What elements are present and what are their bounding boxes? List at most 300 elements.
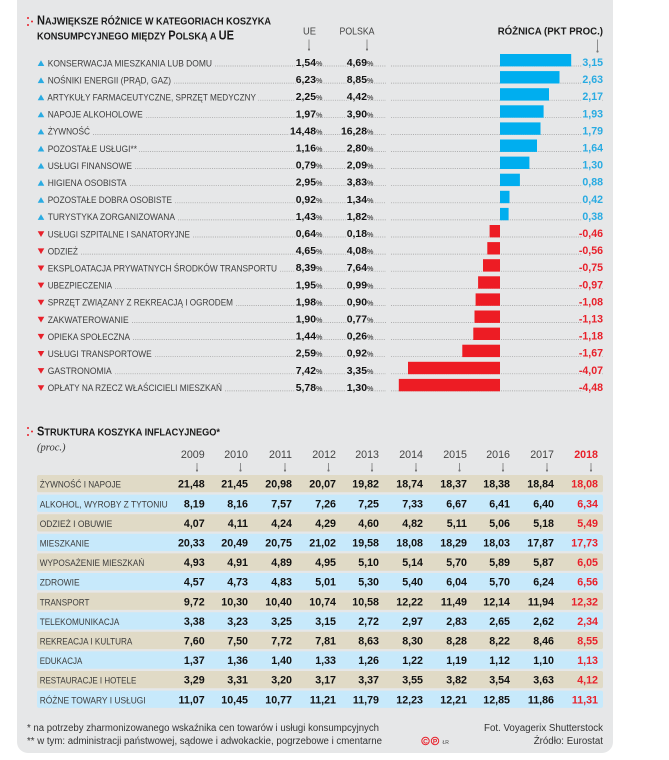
table row: mieszkanie: 18,29 xyxy=(440,538,467,550)
table row: mieszkanie: 20,33 xyxy=(178,538,205,550)
row: usługi szpitalne xyxy=(38,225,603,240)
table row: odzież i obuwie xyxy=(37,514,603,532)
table row: odzież i obuwie: 4,07 xyxy=(184,518,205,530)
table row: różne towary i usługi: 11,31 xyxy=(572,694,598,706)
heading: differences between Poland and EU xyxy=(37,14,271,42)
row: sprzęt związany z rekreacją: % xyxy=(367,298,374,307)
table row: alkohol, wyroby z tytoniu: 6,41 xyxy=(489,498,510,510)
table row: telekomunikacja: 2,34 xyxy=(577,616,598,628)
row: turystyka zorganizowana: % xyxy=(316,213,323,222)
row: eksploatacja środków transportu: EKSPLOATACJA PRYWATNYCH ŚRODKÓW TRANSPORTU xyxy=(48,262,277,274)
year headers: 2018 xyxy=(574,449,598,461)
table row: żywność i napoje: 18,38 xyxy=(483,479,510,491)
row: napoje alkoholowe: % xyxy=(367,110,374,119)
row: pozostałe usługi xyxy=(38,140,603,154)
table row: transport: 9,72 xyxy=(184,596,205,608)
row: żywność: 14,48 xyxy=(290,126,316,137)
row: odzież: % xyxy=(367,247,374,256)
table row: mieszkanie: 17,73 xyxy=(571,538,598,550)
table row: różne towary i usługi: 11,79 xyxy=(353,694,379,706)
table row: wyposażenie mieszkań: 6,05 xyxy=(577,557,598,569)
table row: odzież i obuwie: 4,60 xyxy=(358,518,379,530)
row: żywność: % xyxy=(367,127,374,136)
row: żywność xyxy=(38,122,603,137)
icon: section marker top xyxy=(27,17,33,26)
table row: rekreacja i kultura: 7,60 xyxy=(184,636,205,648)
row: opłaty na rzecz właścicieli xyxy=(38,379,603,394)
table row: odzież i obuwie: 4,24 xyxy=(271,518,292,530)
row: żywność: 1,79 xyxy=(582,125,603,137)
heading: differences between Poland and EU: NAJWIĘKSZE RÓŻNICE W KATEGORIACH KOSZYKA xyxy=(37,14,271,28)
table row: rekreacja i kultura: 7,50 xyxy=(227,636,248,648)
table row: edukacja: 1,22 xyxy=(402,655,423,667)
year headers: 2016 xyxy=(486,449,510,461)
row: opieka społeczna xyxy=(38,328,603,343)
table row: telekomunikacja: 2,97 xyxy=(402,616,423,628)
table row: alkohol, wyroby z tytoniu: 7,25 xyxy=(358,498,379,510)
row: artykuły farmaceutyczne: ARTYKUŁY FARMACEUTYCZNE, SPRZĘT MEDYCZNY xyxy=(47,92,256,102)
unit note: (proc.) xyxy=(37,443,66,454)
table row: wyposażenie mieszkań: WYPOSAŻENIE MIESZKAŃ xyxy=(40,558,144,568)
table row: zdrowie: 5,30 xyxy=(358,577,379,589)
table row: zdrowie: 4,73 xyxy=(227,577,248,589)
table row: edukacja: 1,19 xyxy=(446,655,467,667)
table row: restauracje i hotele: 3,63 xyxy=(533,675,554,687)
table row: alkohol, wyroby z tytoniu: 7,57 xyxy=(271,498,292,510)
table row: restauracje i hotele: 3,82 xyxy=(446,675,467,687)
row: higiena osobista: % xyxy=(316,179,323,188)
table row: rekreacja i kultura: REKREACJA I KULTURA xyxy=(40,636,133,646)
table row: edukacja: 1,12 xyxy=(489,655,510,667)
table row: edukacja: 1,37 xyxy=(184,655,205,667)
row: ubezpieczenia: 1,95 xyxy=(296,280,316,291)
table row: wyposażenie mieszkań: 5,70 xyxy=(446,557,467,569)
row: nośniki energii: % xyxy=(367,76,374,85)
table row: mieszkanie: MIESZKANIE xyxy=(40,538,89,548)
row: usługi szpitalne: USŁUGI SZPITALNE I SANATORYJNE xyxy=(48,229,190,239)
row: odzież: 4,65 xyxy=(296,246,316,257)
table row: restauracje i hotele: 3,37 xyxy=(358,675,379,687)
row: pozostałe dobra osobiste: POZOSTAŁE DOBRA OSOBISTE xyxy=(48,195,172,205)
row: sprzęt związany z rekreacją: 1,98 xyxy=(296,297,316,308)
table row: żywność i napoje: 20,98 xyxy=(265,479,292,491)
table row: telekomunikacja: 2,62 xyxy=(533,616,554,628)
table row: telekomunikacja: 3,23 xyxy=(227,616,248,628)
year headers: 2009 xyxy=(181,449,205,461)
table row: transport xyxy=(37,593,603,610)
row: napoje alkoholowe: 3,90 xyxy=(347,109,367,120)
row: pozostałe usługi: % xyxy=(367,144,374,154)
table row: żywność i napoje: ŻYWNOŚĆ I NAPOJE xyxy=(40,479,121,490)
row: higiena osobista: 3,83 xyxy=(347,178,367,189)
row: eksploatacja środków transportu: % xyxy=(316,264,323,273)
table row: żywność i napoje: 21,45 xyxy=(221,479,248,491)
row: pozostałe usługi: 1,16 xyxy=(296,144,316,154)
table row: żywność i napoje: 21,48 xyxy=(178,479,205,491)
table row: rekreacja i kultura: 7,81 xyxy=(315,636,336,648)
table row: zdrowie: 4,83 xyxy=(271,577,292,589)
row: pozostałe dobra osobiste xyxy=(38,191,603,206)
column headers: RÓŻNICA (PKT PROC.) xyxy=(498,25,603,38)
row: pozostałe dobra osobiste: 0,42 xyxy=(582,194,603,206)
table row: edukacja: 1,10 xyxy=(533,655,554,667)
row: sprzęt związany z rekreacją: % xyxy=(316,298,323,307)
row: eksploatacja środków transportu: 8,39 xyxy=(296,263,316,274)
table row: żywność i napoje xyxy=(37,475,603,492)
table row: wyposażenie mieszkań: 5,10 xyxy=(358,557,379,569)
row: eksploatacja środków transportu: -0,75 xyxy=(579,262,603,274)
row: sprzęt związany z rekreacją: SPRZĘT ZWIĄZANY Z REKREACJĄ I OGRODEM xyxy=(48,298,233,308)
row: usługi szpitalne: % xyxy=(367,230,374,239)
table row: wyposażenie mieszkań: 4,91 xyxy=(227,557,248,569)
row: ubezpieczenia: % xyxy=(367,281,374,290)
year headers: 2010 xyxy=(224,449,248,461)
row: gastronomia: % xyxy=(367,367,374,376)
table row: restauracje i hotele: 4,12 xyxy=(577,675,598,687)
column headers: UE xyxy=(303,26,316,38)
table row: mieszkanie: 21,02 xyxy=(309,538,336,550)
row: usługi szpitalne: % xyxy=(316,230,323,239)
table row: zdrowie: 6,04 xyxy=(446,577,467,589)
table row: edukacja xyxy=(37,651,603,669)
row: gastronomia: 7,42 xyxy=(296,366,316,377)
row: usługi szpitalne: 0,64 xyxy=(296,229,316,240)
row: opłaty na rzecz właścicieli: OPŁATY NA RZECZ WŁAŚCICIELI MIESZKAŃ xyxy=(48,382,222,393)
row: pozostałe dobra osobiste: 0,92 xyxy=(296,195,316,206)
table row: alkohol, wyroby z tytoniu: 7,26 xyxy=(315,498,336,510)
table row: wyposażenie mieszkań: 5,14 xyxy=(402,557,423,569)
table row: rekreacja i kultura: 8,28 xyxy=(446,636,467,648)
row: gastronomia xyxy=(38,362,603,377)
row: żywność: % xyxy=(316,127,323,136)
table row: odzież i obuwie: ODZIEŻ I OBUWIE xyxy=(40,519,112,529)
row: pozostałe usługi: 2,80 xyxy=(347,144,367,154)
copyright marks: P xyxy=(433,738,438,745)
table row: żywność i napoje: 18,37 xyxy=(440,479,467,491)
row: gastronomia: GASTRONOMIA xyxy=(48,366,112,376)
table row: alkohol, wyroby z tytoniu: 8,16 xyxy=(227,498,248,510)
row: opłaty na rzecz właścicieli: -4,48 xyxy=(579,382,603,394)
row: odzież: % xyxy=(316,247,323,256)
row: turystyka zorganizowana: 0,38 xyxy=(582,211,603,223)
heading: differences between Poland and EU: KONSUMPCYJNEGO MIĘDZY POLSKĄ A UE xyxy=(37,28,234,42)
table row: zdrowie: 5,01 xyxy=(315,577,336,589)
table row: żywność i napoje: 20,07 xyxy=(309,479,336,491)
table row: odzież i obuwie: 5,49 xyxy=(577,518,598,530)
photo and source credits: Źródło: Eurostat xyxy=(534,736,603,747)
row: ubezpieczenia: 0,99 xyxy=(347,280,367,291)
table row: rekreacja i kultura: 8,46 xyxy=(533,636,554,648)
table row: transport: 12,32 xyxy=(571,596,598,608)
table row: restauracje i hotele: 3,20 xyxy=(271,675,292,687)
row: sprzęt związany z rekreacją: 0,90 xyxy=(347,297,367,308)
row: higiena osobista: 0,88 xyxy=(582,177,603,189)
table row: wyposażenie mieszkań xyxy=(37,553,603,571)
row: turystyka zorganizowana: % xyxy=(367,213,374,222)
table row: edukacja: 1,40 xyxy=(271,655,292,667)
table row: alkohol, wyroby z tytoniu: 6,34 xyxy=(577,498,598,510)
row: eksploatacja środków transportu: % xyxy=(367,264,374,273)
table row: różne towary i usługi: 10,77 xyxy=(265,694,292,706)
footnotes: * na potrzeby zharmonizowanego wskaźnika cen towarów i usługi konsumpcyjnych xyxy=(27,723,379,734)
year headers: 2012 xyxy=(312,449,336,461)
row: zakwaterowanie: 1,90 xyxy=(296,314,316,326)
row: turystyka zorganizowana: 1,82 xyxy=(347,212,367,223)
copyright marks: C xyxy=(423,738,428,745)
table row: mieszkanie: 18,03 xyxy=(483,538,510,550)
year headers: 2015 xyxy=(443,449,467,461)
table row: różne towary i usługi: RÓŻNE TOWARY I USŁUGI xyxy=(40,695,146,705)
table row: zdrowie: 4,57 xyxy=(184,577,205,589)
table row: zdrowie: ZDROWIE xyxy=(40,578,80,588)
table row: odzież i obuwie: 4,82 xyxy=(402,518,423,530)
table row: odzież i obuwie: 4,29 xyxy=(315,518,336,530)
table row: telekomunikacja xyxy=(37,612,603,630)
row: konserwacja mieszkania: KONSERWACJA MIESZKANIA LUB DOMU xyxy=(48,58,212,68)
row: usługi finansowe: % xyxy=(316,162,323,171)
table row: zdrowie xyxy=(37,573,603,590)
table row: odzież i obuwie: 5,06 xyxy=(489,518,510,530)
table row: transport: 12,22 xyxy=(396,596,423,608)
table row: telekomunikacja: 3,38 xyxy=(184,616,205,628)
row: artykuły farmaceutyczne: 2,25 xyxy=(296,92,316,103)
table row: transport: 10,30 xyxy=(221,596,248,608)
row: turystyka zorganizowana xyxy=(38,208,603,223)
row: usługi finansowe xyxy=(38,157,603,172)
row: napoje alkoholowe: % xyxy=(316,110,323,119)
row: odzież: 4,08 xyxy=(347,246,367,257)
table row: mieszkanie: 19,58 xyxy=(352,538,379,550)
table row: zdrowie: 6,24 xyxy=(533,577,554,589)
row: opieka społeczna: 1,44 xyxy=(296,332,316,343)
row: pozostałe dobra osobiste: 1,34 xyxy=(347,195,367,206)
row: usługi transportowe: 0,92 xyxy=(347,349,367,360)
row: usługi transportowe: % xyxy=(367,350,374,359)
row: turystyka zorganizowana: 1,43 xyxy=(296,212,316,223)
row: artykuły farmaceutyczne: 2,17 xyxy=(582,91,603,103)
table row: żywność i napoje: 18,74 xyxy=(396,479,423,491)
row: gastronomia: -4,07 xyxy=(579,365,603,377)
table row: telekomunikacja: 2,65 xyxy=(489,616,510,628)
row: konserwacja mieszkania: % xyxy=(316,59,323,68)
table row: edukacja: 1,36 xyxy=(227,655,248,667)
table row: odzież i obuwie: 4,11 xyxy=(228,518,248,530)
table row: różne towary i usługi: 12,21 xyxy=(440,694,467,706)
table row: różne towary i usługi: 12,85 xyxy=(483,694,510,706)
row: opłaty na rzecz właścicieli: % xyxy=(367,384,374,393)
year headers: 2011 xyxy=(269,449,292,461)
table row: transport: 10,40 xyxy=(265,596,292,608)
row: opieka społeczna: 0,26 xyxy=(347,332,367,343)
table row: wyposażenie mieszkań: 5,89 xyxy=(489,557,510,569)
table row: zdrowie: 5,40 xyxy=(402,577,423,589)
row: sprzęt związany z rekreacją xyxy=(38,293,603,308)
row: usługi szpitalne: -0,46 xyxy=(579,228,603,240)
row: higiena osobista: 2,95 xyxy=(296,178,316,189)
table row: telekomunikacja: 2,83 xyxy=(446,616,467,628)
copyright marks xyxy=(422,737,449,746)
table row: alkohol, wyroby z tytoniu: 6,67 xyxy=(446,498,467,510)
table row: rekreacja i kultura: 7,72 xyxy=(271,636,292,648)
photo and source credits: Fot. Voyagerix Shutterstock xyxy=(484,723,603,734)
table row: mieszkanie: 18,08 xyxy=(396,538,423,550)
row: napoje alkoholowe: 1,93 xyxy=(582,108,603,120)
column headers: POLSKA xyxy=(340,26,374,38)
row: konserwacja mieszkania: 3,15 xyxy=(582,57,603,69)
row: opłaty na rzecz właścicieli: 1,30 xyxy=(347,383,367,394)
row: opieka społeczna: -1,18 xyxy=(579,331,603,343)
table row: rekreacja i kultura: 8,30 xyxy=(402,636,423,648)
row: gastronomia: % xyxy=(316,367,323,376)
table row: telekomunikacja: 2,72 xyxy=(358,616,379,628)
row: usługi szpitalne: 0,18 xyxy=(347,229,367,240)
row: napoje alkoholowe: NAPOJE ALKOHOLOWE xyxy=(48,110,143,120)
table row: alkohol, wyroby z tytoniu: 7,33 xyxy=(402,498,423,510)
table row: edukacja: 1,33 xyxy=(315,655,336,667)
photo and source credits xyxy=(484,723,603,747)
table row: transport: 10,58 xyxy=(352,596,379,608)
table row: transport: 12,14 xyxy=(483,596,510,608)
table row: mieszkanie: 20,49 xyxy=(221,538,248,550)
row: nośniki energii: NOŚNIKI ENERGII (PRĄD, GAZ) xyxy=(48,74,171,85)
table row: wyposażenie mieszkań: 4,89 xyxy=(271,557,292,569)
row: nośniki energii: 8,85 xyxy=(347,75,367,86)
table row: wyposażenie mieszkań: 4,95 xyxy=(315,557,336,569)
year headers: 2013 xyxy=(355,449,379,461)
heading: inflation basket structure: STRUKTURA KOSZYKA INFLACYJNEGO* xyxy=(37,424,221,438)
row: opłaty na rzecz właścicieli: % xyxy=(316,384,323,393)
table row: zdrowie: 5,70 xyxy=(489,577,510,589)
table row: różne towary i usługi: 11,21 xyxy=(310,694,336,706)
table row: różne towary i usługi xyxy=(37,691,603,708)
row: konserwacja mieszkania xyxy=(38,54,603,69)
year headers: 2014 xyxy=(399,449,423,461)
icon: section marker bottom xyxy=(27,427,33,436)
table row: telekomunikacja: 3,15 xyxy=(315,616,336,628)
table row: restauracje i hotele: 3,29 xyxy=(184,675,205,687)
row: ubezpieczenia xyxy=(38,276,603,291)
row: ubezpieczenia: -0,97 xyxy=(579,279,603,291)
table row: rekreacja i kultura: 8,63 xyxy=(358,636,379,648)
table row: mieszkanie xyxy=(37,534,603,551)
table row: żywność i napoje: 18,08 xyxy=(571,479,598,491)
table row: rekreacja i kultura: 8,55 xyxy=(577,636,598,648)
row: napoje alkoholowe xyxy=(38,105,603,120)
table row: różne towary i usługi: 10,45 xyxy=(221,694,248,706)
table row: mieszkanie: 17,87 xyxy=(527,538,554,550)
table row: restauracje i hotele: 3,54 xyxy=(489,675,510,687)
row: usługi transportowe: -1,67 xyxy=(579,348,603,360)
table row: alkohol, wyroby z tytoniu xyxy=(37,495,603,512)
row: artykuły farmaceutyczne: % xyxy=(367,93,374,102)
row: higiena osobista xyxy=(38,174,603,189)
table row: żywność i napoje: 18,84 xyxy=(527,479,554,491)
row: pozostałe usługi: POZOSTAŁE USŁUGI** xyxy=(48,144,137,154)
row: usługi finansowe: 1,30 xyxy=(582,160,603,172)
row: usługi transportowe: % xyxy=(316,350,323,359)
row: konserwacja mieszkania: % xyxy=(367,59,374,68)
row: nośniki energii xyxy=(38,71,603,86)
row: opieka społeczna: % xyxy=(367,333,374,342)
row: artykuły farmaceutyczne: 4,42 xyxy=(347,92,367,103)
table row: alkohol, wyroby z tytoniu: 8,19 xyxy=(184,498,205,510)
column headers xyxy=(303,25,603,53)
table row: edukacja: EDUKACJA xyxy=(40,656,83,666)
table row: różne towary i usługi: 11,07 xyxy=(179,694,205,706)
table row: wyposażenie mieszkań: 5,87 xyxy=(533,557,554,569)
row: nośniki energii: % xyxy=(316,76,323,85)
table row: alkohol, wyroby z tytoniu: ALKOHOL, WYROBY Z TYTONIU xyxy=(40,499,168,509)
footnotes: ** w tym: administracji państwowej, sądowe i adwokackie, pogrzebowe i cmentarne xyxy=(27,736,383,747)
row: eksploatacja środków transportu: 7,64 xyxy=(347,263,367,274)
table row: restauracje i hotele: 3,17 xyxy=(315,675,336,687)
table row: rekreacja i kultura: 8,22 xyxy=(489,636,510,648)
row: higiena osobista: % xyxy=(367,179,374,188)
row: usługi transportowe: USŁUGI TRANSPORTOWE xyxy=(48,349,152,359)
table row: żywność i napoje: 19,82 xyxy=(352,479,379,491)
row: opieka społeczna: % xyxy=(316,333,323,342)
row: odzież: -0,56 xyxy=(579,245,603,257)
row: zakwaterowanie: % xyxy=(316,316,323,324)
row: pozostałe usługi: % xyxy=(316,144,323,154)
year headers: 2017 xyxy=(530,449,554,461)
row: sprzęt związany z rekreacją: -1,08 xyxy=(579,296,603,308)
row: pozostałe dobra osobiste: % xyxy=(316,196,323,205)
row: opłaty na rzecz właścicieli: 5,78 xyxy=(296,383,316,394)
row: ubezpieczenia: % xyxy=(316,281,323,290)
row: zakwaterowanie xyxy=(38,310,603,326)
row: higiena osobista: HIGIENA OSOBISTA xyxy=(48,178,127,188)
footnotes xyxy=(27,723,383,747)
row: usługi finansowe: USŁUGI FINANSOWE xyxy=(48,161,132,171)
row: usługi finansowe: % xyxy=(367,162,374,171)
row: zakwaterowanie: 0,77 xyxy=(347,314,367,326)
table row: rekreacja i kultura xyxy=(37,632,603,649)
table row: transport: 11,49 xyxy=(441,596,467,608)
row: odzież: ODZIEŻ xyxy=(48,246,78,256)
row: nośniki energii: 2,63 xyxy=(582,74,603,86)
table row: restauracje i hotele: RESTAURACJE I HOTELE xyxy=(40,676,136,686)
row: zakwaterowanie: -1,13 xyxy=(579,314,603,326)
row: konserwacja mieszkania: 1,54 xyxy=(296,58,316,69)
table row: telekomunikacja: 3,25 xyxy=(271,616,292,628)
row: usługi transportowe xyxy=(38,345,603,360)
row: eksploatacja środków transportu xyxy=(38,259,603,274)
row: pozostałe dobra osobiste: % xyxy=(367,196,374,205)
row: napoje alkoholowe: 1,97 xyxy=(296,109,316,120)
table row: transport: 10,74 xyxy=(309,596,336,608)
table row: edukacja: 1,13 xyxy=(577,655,598,667)
table row: różne towary i usługi: 12,23 xyxy=(396,694,423,706)
table row: restauracje i hotele: 3,31 xyxy=(227,675,248,687)
table row: odzież i obuwie: 5,11 xyxy=(447,518,467,530)
table row: restauracje i hotele xyxy=(37,671,603,688)
row: usługi transportowe: 2,59 xyxy=(296,349,316,360)
year headers xyxy=(181,449,598,472)
table row: edukacja: 1,26 xyxy=(358,655,379,667)
table row: zdrowie: 6,56 xyxy=(577,577,598,589)
row: żywność: ŻYWNOŚĆ xyxy=(48,126,90,137)
row: turystyka zorganizowana: TURYSTYKA ZORGANIZOWANA xyxy=(48,212,176,222)
copyright marks: ŁR xyxy=(442,740,449,746)
table row: telekomunikacja: TELEKOMUNIKACJA xyxy=(40,617,120,627)
table row: transport: 11,94 xyxy=(528,596,554,608)
table row: alkohol, wyroby z tytoniu: 6,40 xyxy=(533,498,554,510)
row: ubezpieczenia: UBEZPIECZENIA xyxy=(48,281,113,291)
row: opieka społeczna: OPIEKA SPOŁECZNA xyxy=(48,332,131,342)
row: pozostałe usługi: 1,64 xyxy=(582,142,603,154)
table row: wyposażenie mieszkań: 4,93 xyxy=(184,557,205,569)
